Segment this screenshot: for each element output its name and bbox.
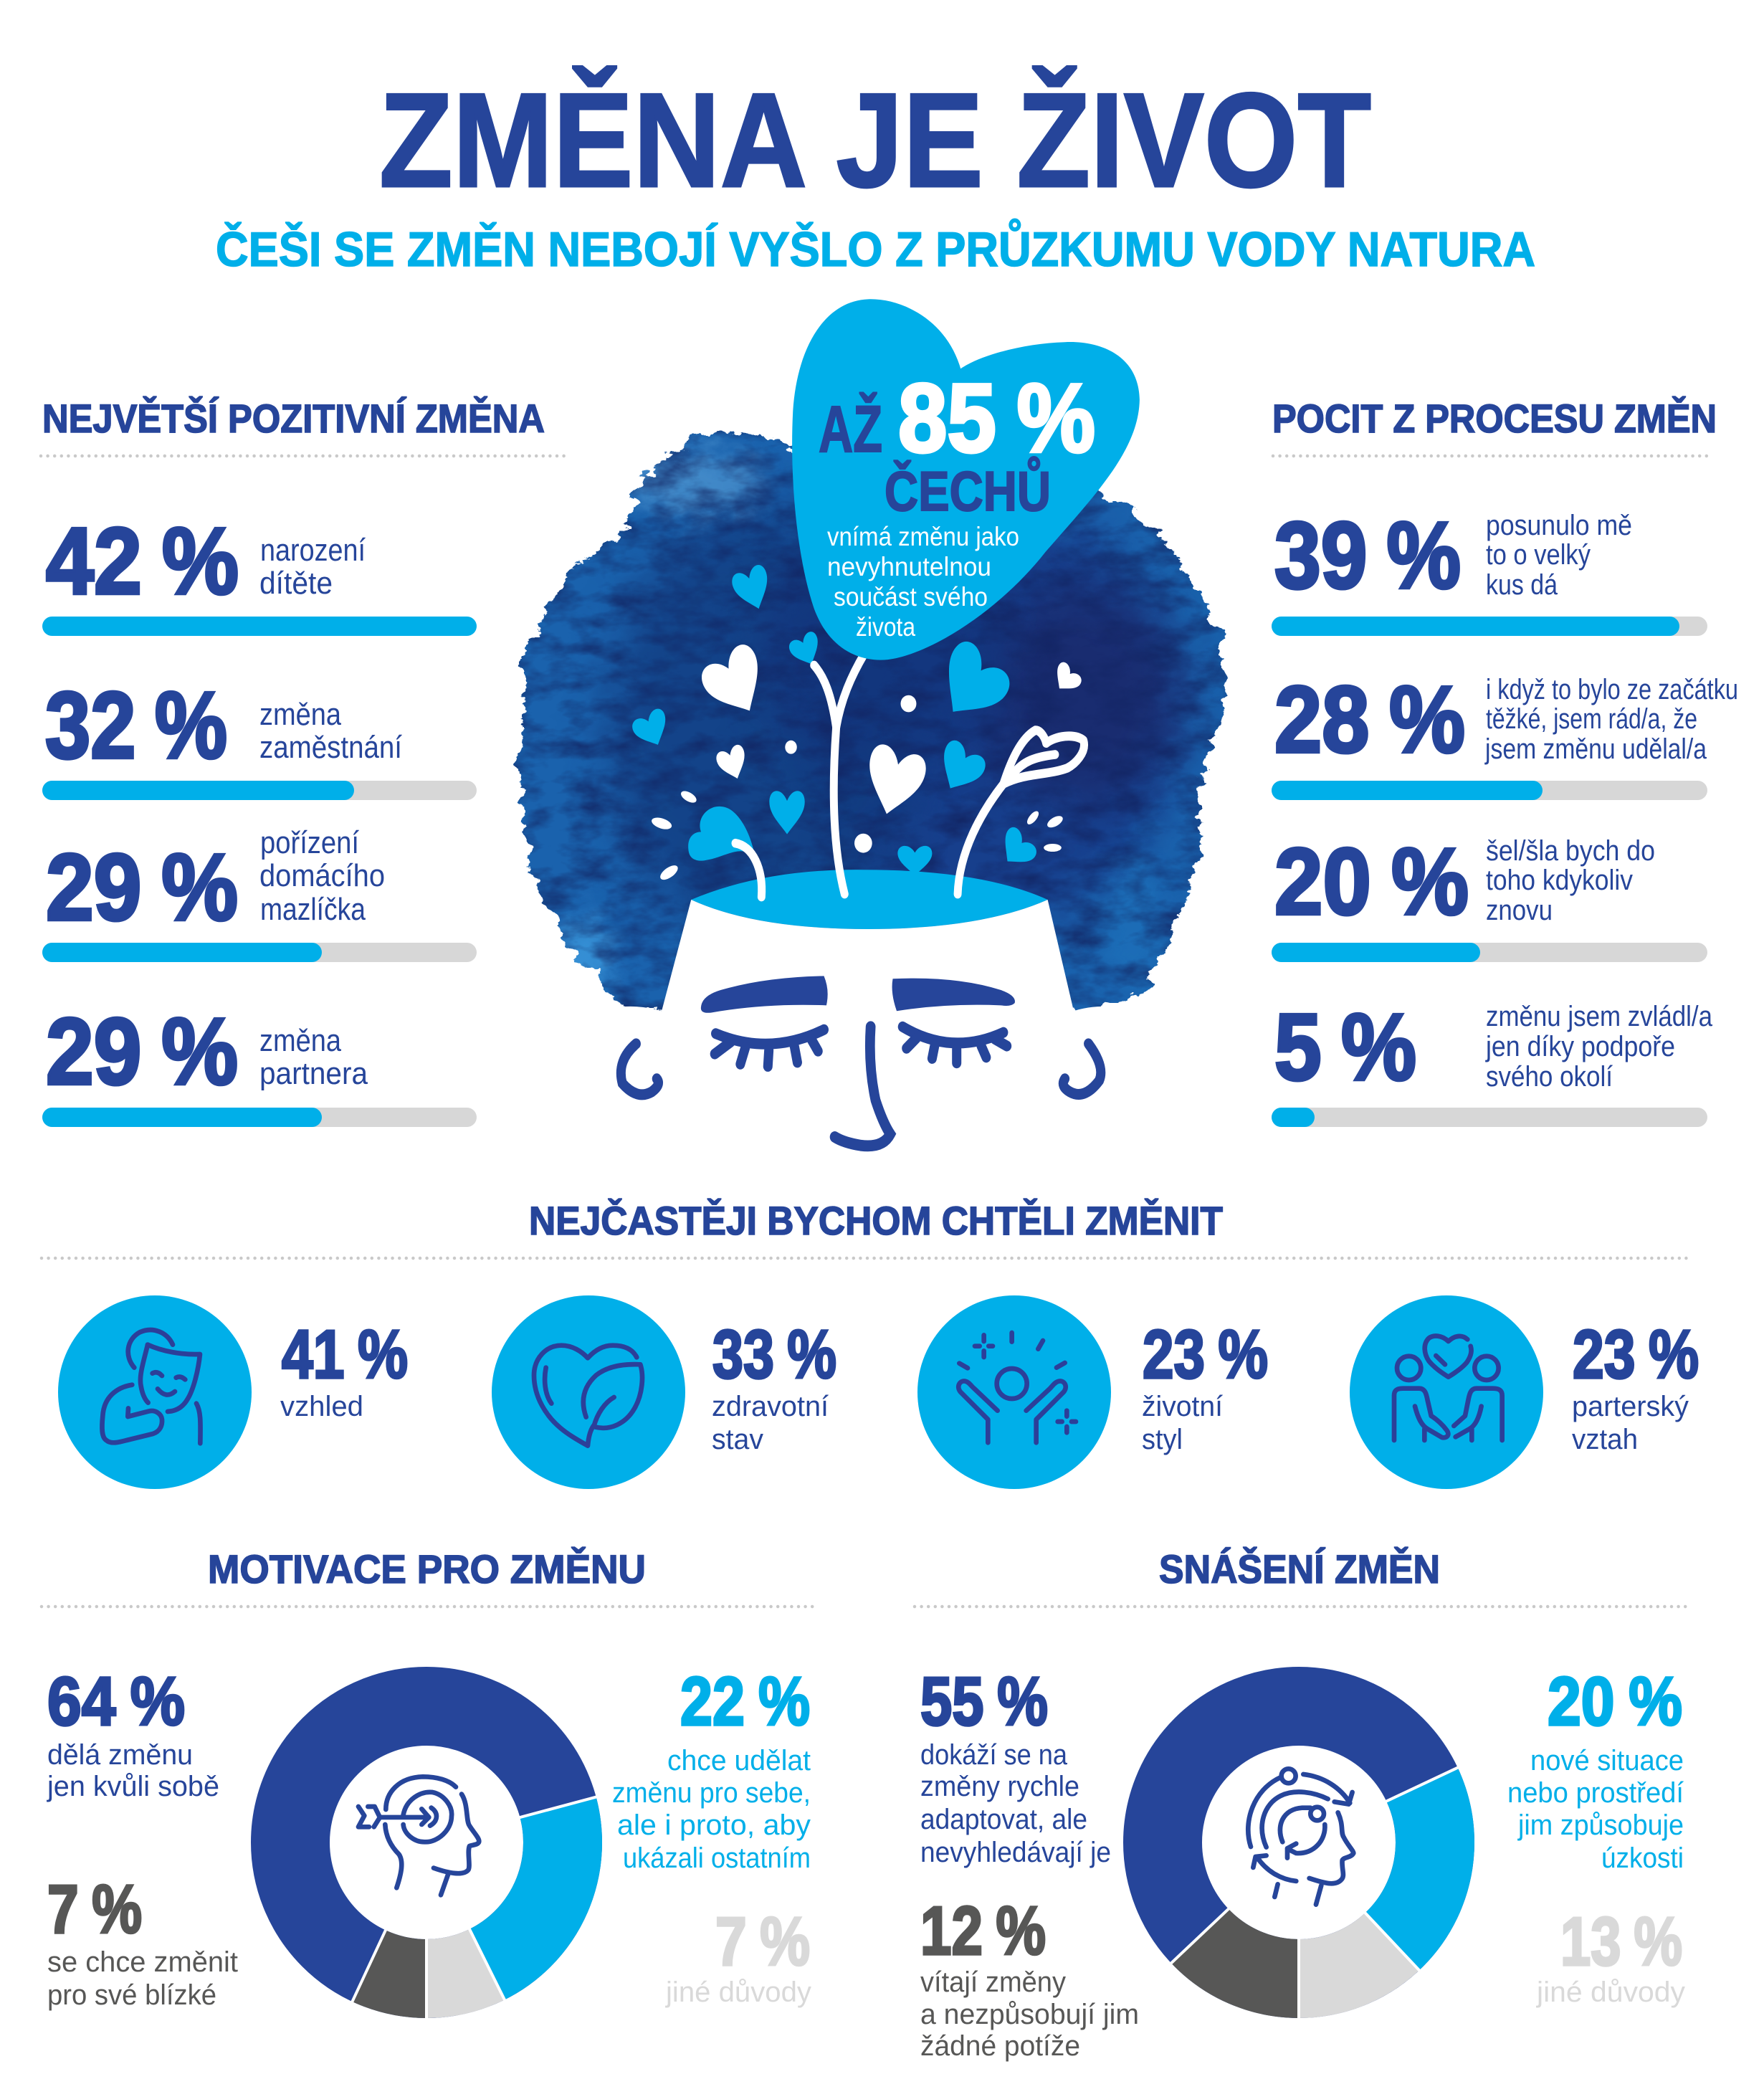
callout text: až 85 % čechů: nevyhnutelnou [827,552,991,581]
row 28 %: těžké, jsem rád/a, že [1486,703,1697,735]
legend: 22 %: chce udělat [667,1745,811,1776]
legend: 13 % [1536,1903,1685,2008]
face [621,976,1101,1146]
heading: největší pozitivní změna: NEJVĚTŠÍ POZITIVNÍ ZMĚNA [42,396,545,441]
legend: 7 % blízcí: 7 % [47,1871,142,1948]
panel: partnerský vztah 23 % [1350,1295,1699,1489]
legend: 7 % jiné: jiné důvody [665,1977,811,2008]
panel: životní styl 23 %: 23 % [1143,1316,1268,1393]
donut chart: snášení změn [1163,1706,1461,2022]
legend: 64 % [47,1663,219,1802]
row 42 % [42,508,477,636]
legend: 22 %: změnu pro sebe, [612,1777,811,1809]
legend: 22 % [612,1663,811,1874]
icon: couple with heart [1394,1336,1502,1440]
callout text: až 85 % čechů [819,363,1095,642]
legend: 20 %: nové situace [1530,1745,1684,1776]
head [563,900,1178,1168]
row 32 %: zaměstnání [259,730,403,765]
panel: partnerský vztah 23 %: 23 % [1573,1316,1699,1393]
row 29 % pet: mazlíčka [260,892,366,927]
legend: 20 %: úzkosti [1601,1842,1684,1874]
icon: raised arms person [958,1333,1076,1442]
legend: 7 % jiné: 7 % [715,1903,810,1980]
legend: 55 %: nevyhledávají je [920,1837,1111,1868]
legend: 55 %: dokáží se na [920,1739,1068,1771]
panel: zdravotní stav 33 % [492,1295,836,1489]
row 42 %: dítěte [259,566,333,601]
panel: zdravotní stav 33 %: zdravotní [712,1391,829,1422]
row 32 % [42,672,477,800]
legend: 55 %: změny rychle [920,1771,1079,1802]
heading: pocit z procesu změn: POCIT Z PROCESU ZMĚN [1272,396,1717,441]
legend: 55 % [920,1663,1111,1868]
callout text: až 85 % čechů: vnímá změnu jako [827,522,1019,551]
donut chart: motivace [290,1706,599,2022]
row 29 % pet: domácího [259,858,385,893]
row 5 %: jen díky podpoře [1485,1031,1675,1062]
row 20 %: 20 % [1274,829,1469,934]
icon: head with cycle arrows [1248,1769,1353,1905]
row 28 %: 28 % [1274,667,1465,772]
legend: 13 %: jiné důvody [1536,1977,1685,2008]
stems [735,654,1084,897]
central illustration [520,299,1225,1168]
row 42 %: narození [260,533,366,568]
heading: nejčastěji bychom chtěli změnit: NEJČASTĚJI BYCHOM CHTĚLI ZMĚNIT [529,1198,1223,1243]
legend: 20 %: jim způsobuje [1517,1809,1684,1841]
legend: 13 %: 13 % [1560,1903,1682,1980]
row 20 %: toho kdykoliv [1486,865,1633,896]
legend: 64 %: dělá změnu [47,1739,193,1771]
callout text: až 85 % čechů: AŽ [819,391,882,466]
panel: partnerský vztah 23 %: parterský [1572,1391,1689,1422]
row 20 %: znovu [1486,895,1553,926]
legend: 7 % blízcí: pro své blízké [47,1979,216,2011]
panel: největší pozitivní změna [42,508,477,1127]
panel: životní styl 23 %: styl [1142,1424,1183,1455]
legend: 55 %: adaptovat, ale [920,1804,1087,1835]
head top [691,870,1048,929]
row 39 %: to o velký [1486,539,1591,571]
row 42 %: 42 % [46,508,239,614]
row 28 %: jsem změnu udělal/a [1484,733,1707,765]
panel: vzhled 41 % [58,1295,408,1489]
row 32 %: 32 % [45,672,227,778]
panel: partnerský vztah 23 %: vztah [1572,1424,1638,1455]
title: ZMĚNA JE ŽIVOT [379,65,1371,215]
row 39 %: kus dá [1486,569,1558,601]
legend: 64 %: jen kvůli sobě [47,1771,219,1802]
row 29 % partner [42,999,477,1127]
legend: 20 %: nebo prostředí [1507,1777,1684,1809]
callout text: až 85 % čechů: 85 % [898,363,1095,472]
panel: pocit z procesu změn [1272,503,1738,1127]
row 29 % pet: pořízení [260,825,360,860]
watercolor hair blob [520,433,1225,1013]
callout text: až 85 % čechů: součást svého [834,582,988,612]
row 28 % [1272,667,1738,800]
row 5 % [1272,994,1713,1127]
row 5 %: 5 % [1274,994,1416,1100]
subtitle: ČEŠI SE ZMĚN NEBOJÍ VYŠLO Z PRŮZKUMU VODY NATURA [216,218,1535,277]
panel: životní styl 23 % [917,1295,1268,1489]
legend: 12 %: 12 % [920,1893,1046,1969]
row 5 %: změnu jsem zvládl/a [1486,1001,1713,1032]
row 29 % partner: partnera [259,1056,368,1091]
hearts [730,563,776,616]
row 20 % [1272,829,1707,962]
legend: 20 %: 20 % [1548,1663,1682,1740]
row 39 %: 39 % [1274,503,1461,608]
speech heart bubble [792,299,1140,660]
row 39 %: posunulo mě [1486,510,1632,541]
heading: snášení změn: SNÁŠENÍ ZMĚN [1159,1546,1440,1592]
row 29 % pet: 29 % [46,834,238,940]
dots [900,695,916,712]
legend: 12 %: vítají změny [920,1966,1066,1998]
row 29 % partner: změna [259,1023,341,1058]
legend: 20 % [1507,1663,1684,1874]
legend: 22 %: 22 % [680,1663,810,1740]
row 29 % partner: 29 % [46,999,238,1104]
legend: 12 % [920,1893,1139,2062]
row 5 %: svého okolí [1486,1061,1613,1093]
legend: 7 % blízcí: se chce změnit [47,1946,238,1978]
legend: 12 %: žádné potíže [920,2030,1080,2062]
panel: vzhled 41 %: vzhled [280,1391,363,1422]
legend: 7 % jiné [665,1903,811,2008]
legend: 12 %: a nezpůsobují jim [920,1999,1139,2030]
row 39 % [1272,503,1707,636]
legend: 55 %: 55 % [920,1663,1048,1740]
row 29 % pet [42,825,477,962]
row 20 %: šel/šla bych do [1486,835,1655,867]
panel: zdravotní stav 33 %: 33 % [712,1316,836,1393]
stems and hearts [630,563,1084,929]
panel: životní styl 23 %: životní [1142,1391,1223,1422]
callout text: až 85 % čechů: ČECHŮ [885,457,1051,523]
legend: 22 %: ale i proto, aby [617,1809,811,1841]
callout text: až 85 % čechů: života [856,612,915,642]
row 32 %: změna [259,697,341,732]
heading: motivace pro změnu: MOTIVACE PRO ZMĚNU [208,1546,646,1592]
icon: happy mask [102,1330,201,1443]
legend: 22 %: ukázali ostatním [623,1842,811,1874]
icon: head with target and arrow [358,1776,479,1895]
panel: vzhled 41 %: 41 % [282,1316,408,1393]
leaf heart [688,807,755,861]
legend: 64 %: 64 % [47,1663,185,1740]
icon: heart with leaf [534,1346,642,1446]
panel: zdravotní stav 33 %: stav [712,1424,763,1455]
legend: 7 % blízcí [47,1871,238,2011]
